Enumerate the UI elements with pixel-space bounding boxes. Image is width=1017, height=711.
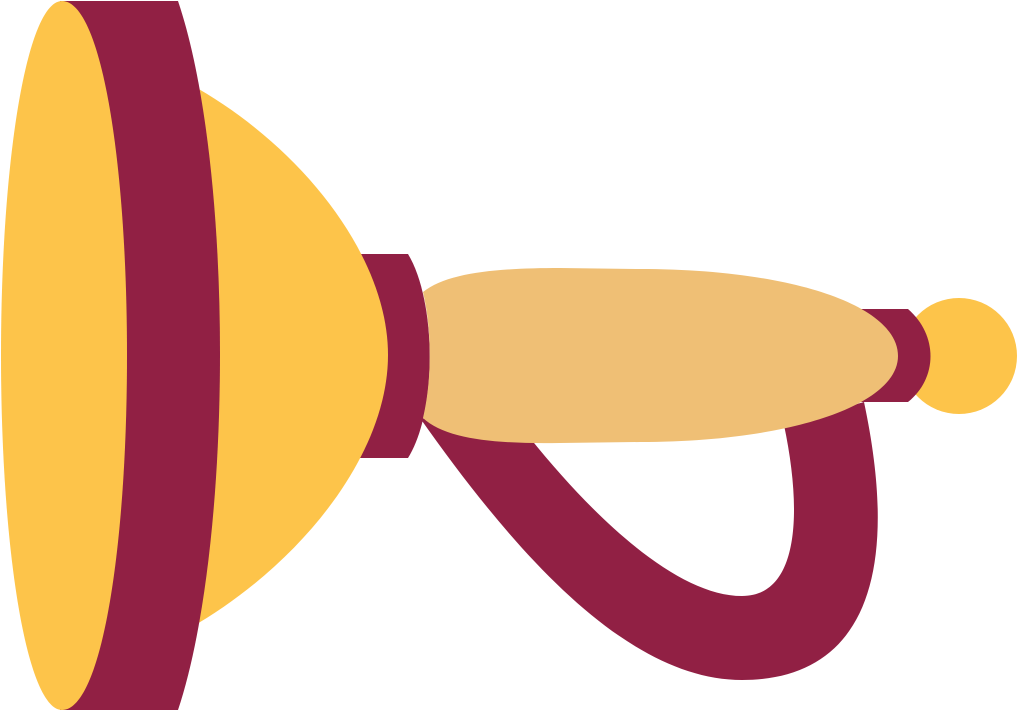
mouthpiece ball (901, 298, 1017, 414)
trumpet tubing loop (420, 402, 878, 680)
trumpet body (423, 268, 898, 443)
bell neck collar (350, 254, 430, 458)
mouthpiece collar (850, 309, 930, 402)
bell cone (190, 84, 388, 628)
bell opening (1, 1, 127, 710)
bell rim (60, 1, 220, 710)
